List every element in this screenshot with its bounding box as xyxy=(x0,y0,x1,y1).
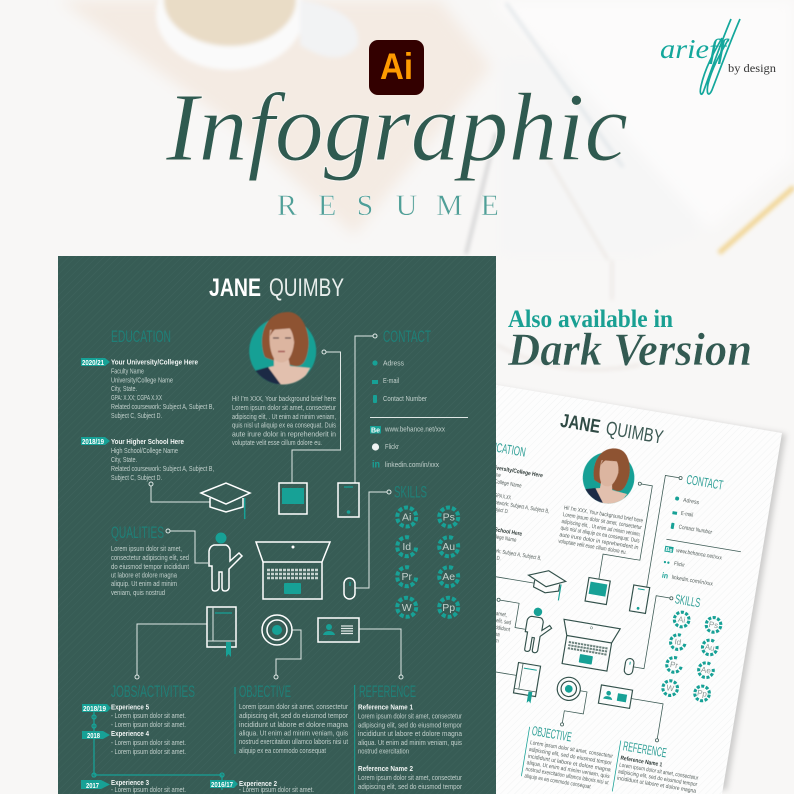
reference: adipiscing elit, sed do eiusmod tempor xyxy=(358,720,462,729)
icon: mouse xyxy=(344,578,355,599)
skills: Id xyxy=(674,637,682,647)
objective: adipiscing elit, sed do eiusmod tempor xyxy=(239,711,348,720)
biography text: adipiscing elit, . Ut enim ad minim veniam, xyxy=(232,412,336,421)
education: City, State. xyxy=(111,455,137,464)
reference: Reference Name 1 xyxy=(620,756,663,769)
qualities: do eiusmod tempor incididunt xyxy=(450,617,511,633)
icons xyxy=(508,568,650,720)
callout: dark version: Dark Version xyxy=(507,324,752,376)
panel: white resume xyxy=(496,385,782,794)
contact xyxy=(370,327,468,470)
jobs timeline: Experience 2 xyxy=(239,779,277,788)
contact: Contact Number xyxy=(678,524,713,536)
education: High School/College Name xyxy=(465,529,517,544)
icon: tablet xyxy=(279,483,307,514)
skills: W xyxy=(402,602,412,614)
icon: graduation cap xyxy=(201,483,250,519)
name heading: JANE xyxy=(209,274,261,302)
skills xyxy=(659,591,727,702)
jobs timeline: 2016/17 xyxy=(211,780,233,789)
skills: Pp xyxy=(442,602,455,614)
education: GPA: X.XX; CGPA X.XX xyxy=(472,489,511,502)
education: 2020/21 xyxy=(82,358,104,367)
jobs timeline: Experience 3 xyxy=(111,778,149,787)
education: Your Higher School Here xyxy=(466,523,523,538)
jobs timeline: - Lorem ipsum dolor sit amet. xyxy=(239,785,314,794)
education: City, State. xyxy=(473,482,494,492)
objective xyxy=(521,723,617,793)
biography text: Lorem ipsum dolor sit amet, consectetur xyxy=(562,512,642,531)
icon: person xyxy=(209,532,242,591)
qualities: aliquip. Ut enim ad minim xyxy=(448,630,499,645)
icon: phone xyxy=(338,483,359,517)
skills xyxy=(394,483,461,617)
reference: Lorem ipsum dolor sit amet, consectetur xyxy=(619,763,699,782)
reference: aliqua. Ut enim ad minim veniam, quis xyxy=(358,738,462,747)
qualities: consectetur adipiscing elit, sed xyxy=(451,611,512,626)
skills: W xyxy=(666,683,675,693)
jobs timeline xyxy=(81,682,314,794)
subtitle: RESUME xyxy=(277,189,499,222)
education xyxy=(461,437,560,569)
contact: Flickr xyxy=(385,442,399,451)
objective: nostrud exercitation ullamco laboris nisi ut xyxy=(239,737,348,746)
contact: www.behance.net/xxx xyxy=(384,425,445,434)
jobs timeline: - Lorem ipsum dolor sit amet. xyxy=(111,738,186,747)
objective: aliquip ex ea commodo consequat xyxy=(524,773,591,791)
education: City, State. xyxy=(464,536,485,546)
biography text xyxy=(232,394,336,447)
skills: Ai xyxy=(402,512,411,524)
education: Related coursework: Subject A, Subject B, xyxy=(463,543,542,562)
education: Your Higher School Here xyxy=(111,437,184,446)
icon: id card xyxy=(318,618,359,642)
background: blurred desk photo xyxy=(72,0,794,370)
education: Your University/College Here xyxy=(476,462,544,479)
education: Subject C, Subject D. xyxy=(461,550,501,562)
education: Your University/College Here xyxy=(111,358,198,367)
contact: Be xyxy=(665,547,673,554)
skills: Ai xyxy=(677,615,686,625)
logo: arieff by design: arieff xyxy=(660,34,730,64)
qualities xyxy=(447,586,516,653)
objective: OBJECTIVE xyxy=(531,723,573,745)
education: University/College Name xyxy=(474,476,522,490)
qualities: consectetur adipiscing elit, sed xyxy=(111,553,189,562)
objective xyxy=(235,682,349,755)
contact: www.behance.net/xxx xyxy=(675,548,722,562)
name heading xyxy=(559,411,665,449)
reference: nostrud exercitation xyxy=(358,747,409,756)
skills: Au xyxy=(442,541,455,553)
reference: Lorem ipsum dolor sit amet, consectetur xyxy=(358,773,462,782)
skills: Pr xyxy=(669,660,679,670)
education: High School/College Name xyxy=(111,446,178,455)
reference xyxy=(355,682,463,794)
objective: aliqua. Ut enim ad minim veniam, quis xyxy=(526,760,610,780)
biography text: Lorem ipsum dolor sit amet, consectetur xyxy=(232,403,336,412)
education: Related coursework: Subject A, Subject B, xyxy=(111,464,214,473)
biography text: aute irure dolor in reprehenderit in xyxy=(232,430,336,438)
qualities xyxy=(111,523,189,597)
contact: in xyxy=(372,460,380,470)
skills: Ps xyxy=(708,620,719,630)
education: Subject C, Subject D. xyxy=(111,473,162,482)
qualities: QUALITIES xyxy=(111,523,164,542)
title: Infographic xyxy=(165,74,628,182)
education: EDUCATION xyxy=(111,327,171,346)
education: Subject C, Subject D. xyxy=(469,503,509,515)
reference: adipiscing elit, sed do eiusmod tempor xyxy=(618,769,698,788)
panel: white resume shadow xyxy=(470,383,786,790)
name heading xyxy=(209,274,344,302)
education: 2018/19 xyxy=(82,437,104,446)
skills: Ps xyxy=(443,512,455,524)
icon: laptop xyxy=(256,542,330,599)
reference xyxy=(612,738,703,794)
qualities: Lorem ipsum dolor sit amet, xyxy=(111,544,182,553)
objective: Lorem ipsum dolor sit amet, consectetur xyxy=(239,702,348,711)
contact: CONTACT xyxy=(685,472,724,493)
biography text xyxy=(558,505,644,558)
skills: Pp xyxy=(696,688,708,699)
objective: incididunt ut labore et dolore magna xyxy=(527,754,612,774)
jobs timeline: 2018 xyxy=(87,731,100,740)
icon: target xyxy=(262,615,292,645)
education: City, State. xyxy=(111,384,137,393)
reference: incididunt ut labore et dolore magna xyxy=(358,729,463,738)
skills: Ae xyxy=(700,665,712,676)
portrait xyxy=(582,448,635,504)
education: GPA: X.XX; CGPA X.XX xyxy=(111,393,162,402)
contact: Be xyxy=(371,426,380,434)
reference: REFERENCE xyxy=(359,682,416,701)
education: Related coursework: Subject A, Subject B, xyxy=(470,496,550,515)
name heading: QUIMBY xyxy=(269,274,344,302)
education: Related coursework: Subject A, Subject B, xyxy=(111,402,214,411)
education xyxy=(81,327,214,482)
education: Faculty Name xyxy=(475,469,501,479)
objective: Lorem ipsum dolor sit amet, consectetur xyxy=(530,740,613,760)
qualities: veniam, quis nostrud xyxy=(447,637,489,650)
education: University/College Name xyxy=(111,375,173,384)
jobs timeline: - Lorem ipsum dolor sit amet. xyxy=(111,785,186,794)
jobs timeline: - Lorem ipsum dolor sit amet. xyxy=(111,711,186,720)
jobs timeline: Experience 5 xyxy=(111,702,150,712)
icon: book xyxy=(207,607,236,657)
logo: arieff by design xyxy=(660,19,776,94)
jobs timeline: 2017 xyxy=(86,781,99,790)
objective: adipiscing elit, sed do eiusmod tempor xyxy=(528,747,612,767)
objective: aliquip ex ea commodo consequat xyxy=(239,746,326,755)
contact: linkedin.com/in/xxx xyxy=(385,460,439,469)
education: Faculty Name xyxy=(111,366,144,376)
skills: Ae xyxy=(442,571,455,583)
icon: Adobe Illustrator logo xyxy=(369,40,424,95)
connectors xyxy=(135,334,403,679)
contact: Contact Number xyxy=(383,394,427,403)
reference: adipiscing elit, sed do eiusmod tempor xyxy=(358,782,462,791)
qualities: ut labore et dolore magna xyxy=(111,571,178,580)
reference: Lorem ipsum dolor sit amet, consectetur xyxy=(358,712,462,721)
objective: nostrud exercitation ullamco laboris nisi ut xyxy=(525,767,609,786)
icon: Adobe Illustrator logo: Ai xyxy=(380,46,413,87)
skills: SKILLS xyxy=(674,591,702,610)
contact: in xyxy=(661,571,669,581)
objective: OBJECTIVE xyxy=(239,682,291,701)
logo: arieff by design: by design xyxy=(728,61,776,75)
qualities: aliquip. Ut enim ad minim xyxy=(111,579,177,588)
biography text: adipiscing elit, . Ut enim ad minim veniam, xyxy=(561,519,641,538)
contact: Adress xyxy=(383,359,404,368)
jobs timeline: Experience 4 xyxy=(111,729,150,738)
reference: Reference Name 2 xyxy=(358,764,413,773)
qualities: QUALITIES xyxy=(454,586,497,608)
biography text: voluptate velit esse cillum dolore eu. xyxy=(232,438,322,447)
biography text: quis nisl ut aliquip ex ea consequat. Duis xyxy=(560,525,640,545)
callout: also available in: Also available in xyxy=(508,306,673,333)
contact: CONTACT xyxy=(383,327,431,346)
skills: SKILLS xyxy=(394,483,427,502)
education: Subject C, Subject D. xyxy=(111,411,162,420)
jobs timeline: JOBS/ACTIVITIES xyxy=(111,682,195,701)
name heading: JANE xyxy=(559,411,602,438)
qualities: ut labore et dolore magna xyxy=(449,624,501,639)
connectors xyxy=(455,446,702,742)
jobs timeline: 2018/19 xyxy=(83,704,106,713)
panel: dark resume xyxy=(58,256,496,794)
objective: aliqua. Ut enim ad minim veniam, quis xyxy=(239,728,348,738)
name heading: QUIMBY xyxy=(604,418,665,449)
skills: Au xyxy=(704,642,715,653)
reference: Reference Name 1 xyxy=(358,702,414,712)
biography text: Hi! I'm XXX, Your background brief here xyxy=(563,505,643,524)
qualities: Lorem ipsum dolor sit amet, xyxy=(452,604,508,619)
qualities: veniam, quis nostrud xyxy=(111,588,165,597)
reference: REFERENCE xyxy=(622,738,668,760)
biography text: aute irure dolor in reprehenderit in xyxy=(559,532,639,551)
jobs timeline: - Lorem ipsum dolor sit amet. xyxy=(111,747,186,756)
biography text: voluptate velit esse cillum dolore eu. xyxy=(558,539,627,556)
education: EDUCATION xyxy=(479,437,527,460)
contact: Flickr xyxy=(673,561,685,569)
qualities: do eiusmod tempor incididunt xyxy=(111,562,189,571)
portrait xyxy=(249,312,316,386)
contact: Adress xyxy=(683,498,700,506)
objective: incididunt ut labore et dolore magna xyxy=(239,720,349,729)
contact: E-mail xyxy=(680,511,693,519)
skills: Id xyxy=(402,541,411,553)
biography text: Hi! I'm XXX, Your background brief here xyxy=(232,394,336,403)
contact: E-mail xyxy=(383,376,399,385)
biography text: quis nisl ut aliquip ex ea consequat. Duis xyxy=(232,420,336,430)
contact xyxy=(660,470,752,592)
jobs timeline: - Lorem ipsum dolor sit amet. xyxy=(111,720,186,729)
contact: linkedin.com/in/xxx xyxy=(671,575,713,588)
skills: Pr xyxy=(401,571,412,583)
